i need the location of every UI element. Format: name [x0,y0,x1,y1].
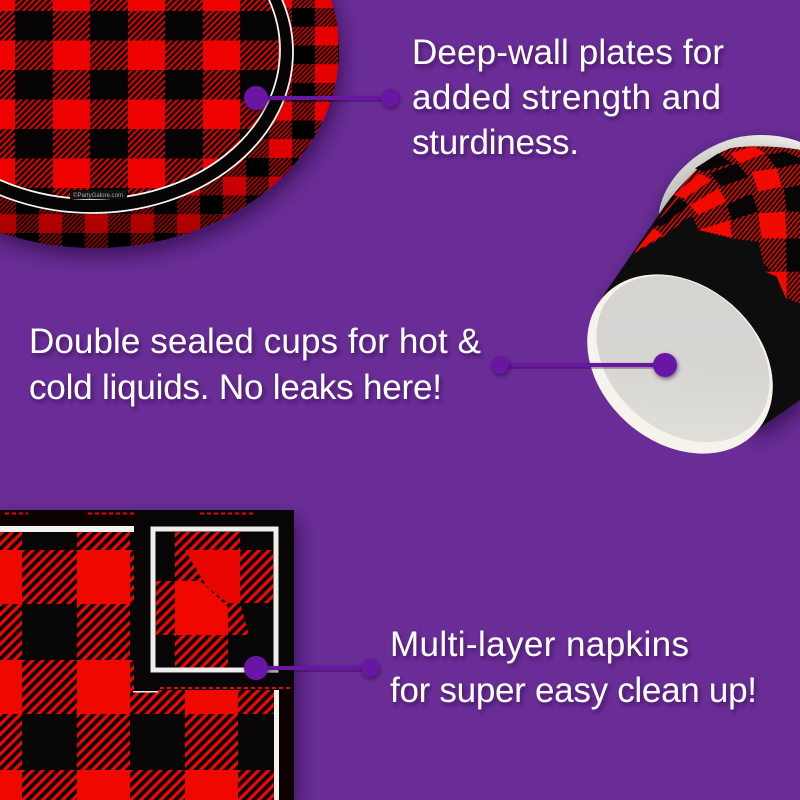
napkin body [0,510,294,800]
anchor dot [244,86,268,110]
cup base [563,242,800,476]
panel: napkin [0,510,294,800]
text: napkin callout: for super easy clean up! [390,671,757,710]
text: napkin callout [390,625,757,710]
text: plate callout: Deep-wall plates for [412,33,724,72]
napkin plaid [0,532,275,800]
napkin fold highlight [133,691,158,692]
napkin fold panel [153,529,276,670]
plate copyright mark: ©PartyGalore.com [73,192,123,199]
cup base rim [551,237,800,491]
text: plate callout: added strength and [412,78,721,117]
text: napkin callout: Multi-layer napkins [390,625,689,664]
callout: plate [244,86,399,110]
plate copyright mark [70,190,127,199]
plate ring [0,0,293,213]
panel: cup [551,135,800,491]
connector line [500,363,665,367]
text: cup callout [29,322,481,407]
text: cup callout: Double sealed cups for hot & [29,322,481,361]
text: cup callout: cold liquids. No leaks here! [29,368,442,407]
napkin right white stripe [274,690,279,800]
end dot [361,659,379,677]
cup top rim [659,135,800,240]
panel: plate [0,0,339,248]
connector line [256,666,370,670]
napkin folded band [134,510,294,692]
anchor dot [653,353,677,377]
napkin edge stitching [5,514,290,688]
plate rim [0,0,339,248]
end dot [381,89,399,107]
callout: napkin [244,656,379,680]
napkin outer white stripe [0,526,136,532]
plate centre [0,0,280,199]
connector line [256,96,390,100]
cup plaid wrap [632,146,800,303]
callout: cup [491,353,677,377]
text: plate callout [412,33,724,162]
anchor dot [244,656,268,680]
end dot [491,356,509,374]
text: plate callout: sturdiness. [412,123,579,162]
cup body [603,147,800,430]
